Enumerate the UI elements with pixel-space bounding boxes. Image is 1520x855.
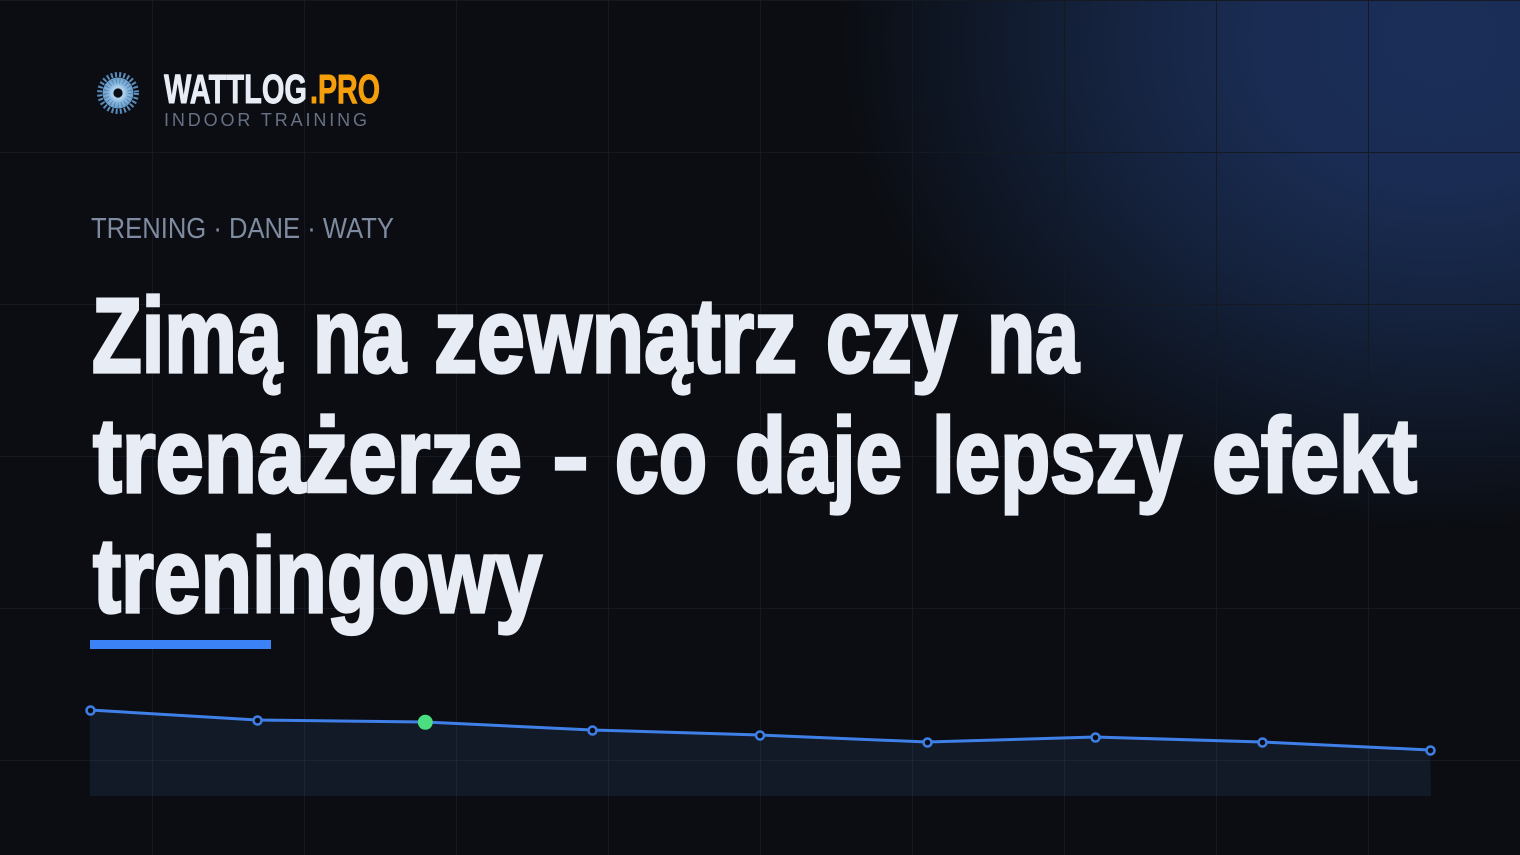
category label: TRENING · DANE · WATY bbox=[91, 213, 394, 245]
chart area fill bbox=[90, 710, 1431, 796]
highlighted data point bbox=[418, 715, 433, 730]
title: daje bbox=[735, 397, 902, 515]
title: – bbox=[554, 397, 587, 515]
title: lepszy bbox=[932, 397, 1182, 515]
title: czy bbox=[826, 277, 957, 395]
title: na bbox=[987, 277, 1080, 395]
title: trenażerze bbox=[93, 397, 522, 515]
title: zewnątrz bbox=[434, 277, 797, 395]
icon: cassette gear logo bbox=[100, 74, 136, 112]
title: na bbox=[313, 277, 407, 395]
brand name: .PRO bbox=[310, 66, 380, 112]
brand name: WATTLOG bbox=[164, 66, 307, 112]
chart data points bbox=[86, 706, 1434, 754]
title: treningowy bbox=[93, 517, 542, 635]
title bbox=[92, 277, 1417, 635]
chart line bbox=[90, 710, 1430, 750]
title underline accent bbox=[90, 640, 271, 649]
title: efekt bbox=[1212, 397, 1417, 515]
brand tagline: INDOOR TRAINING bbox=[164, 110, 367, 130]
line chart bbox=[86, 706, 1434, 796]
title: Zimą bbox=[92, 277, 283, 395]
title: co bbox=[615, 397, 707, 515]
